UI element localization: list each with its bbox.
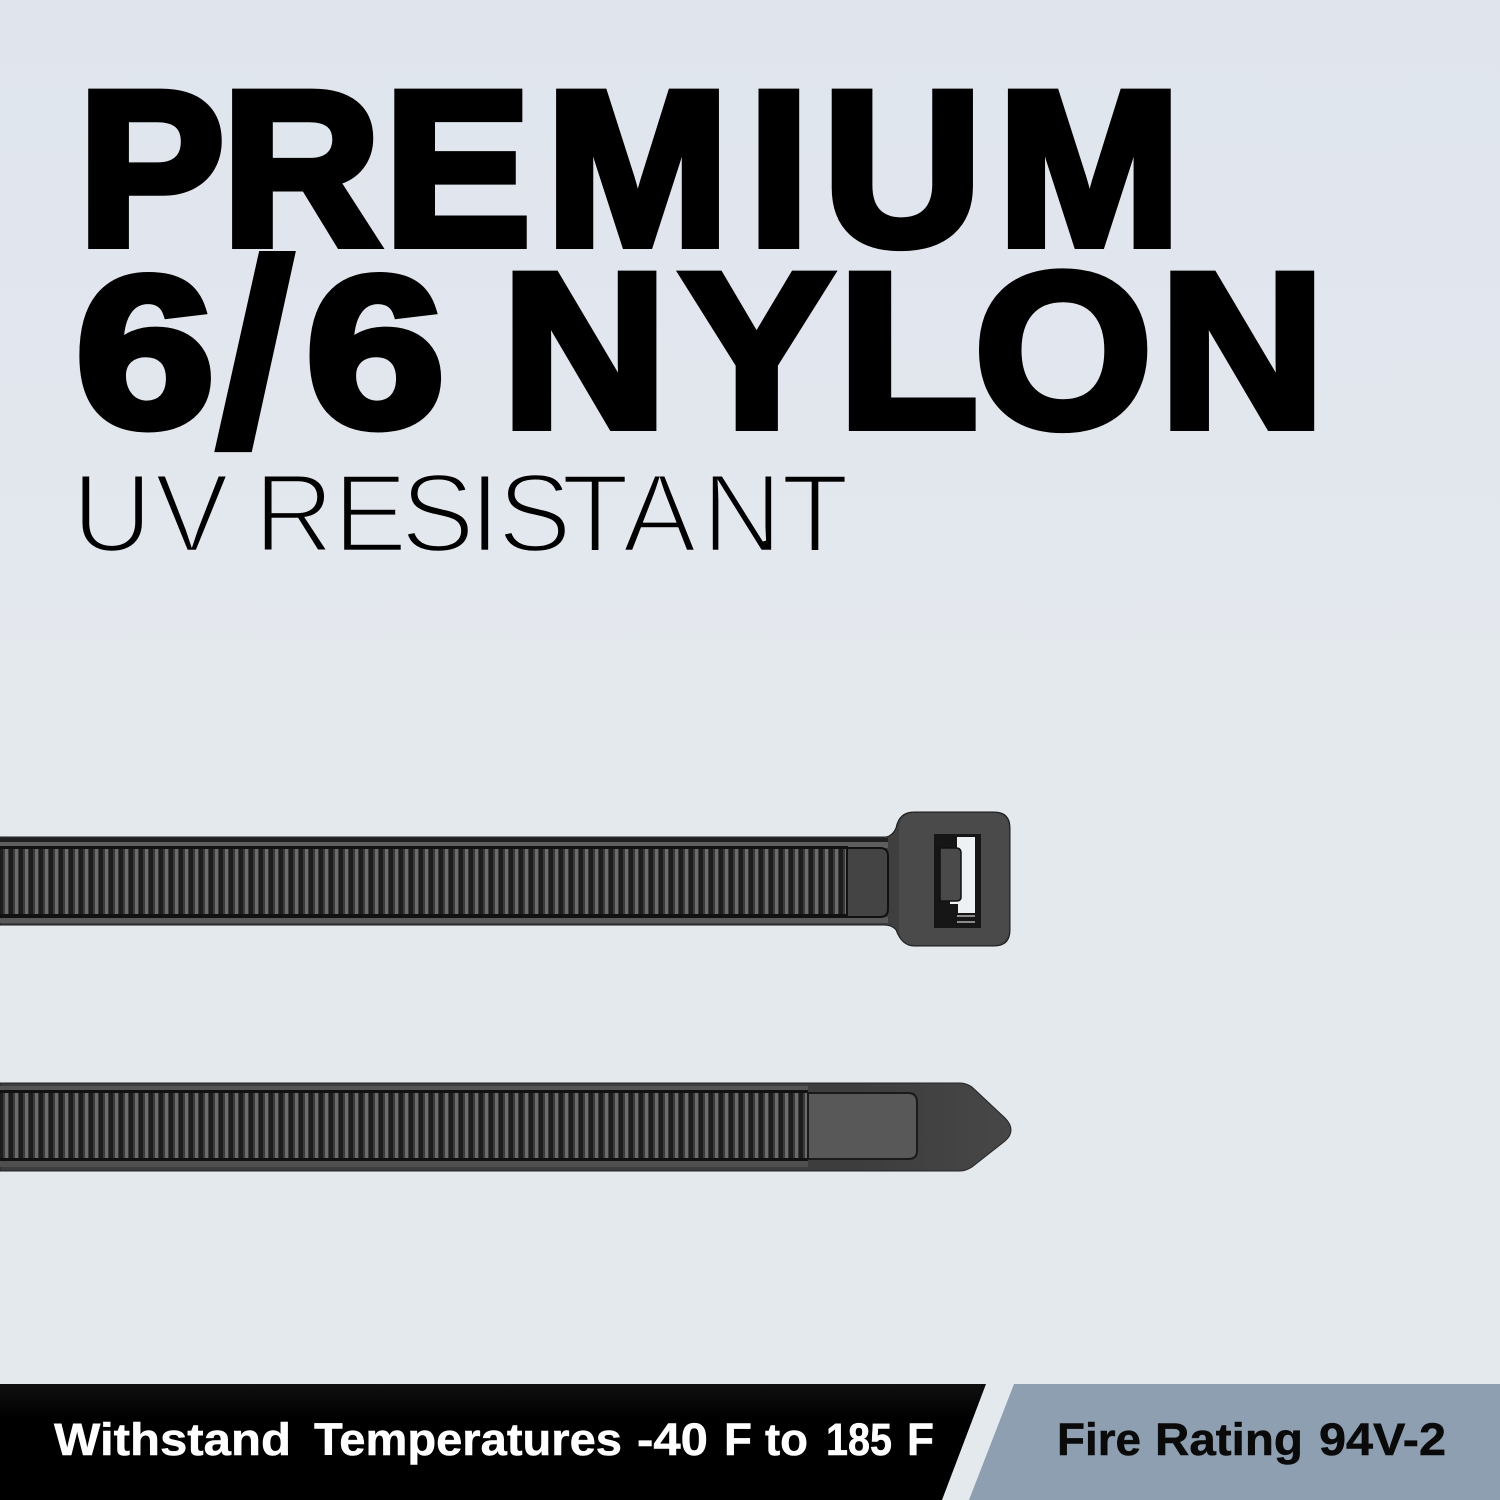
- footer: temperature band: F: [907, 1414, 934, 1465]
- smooth panel: [808, 1093, 917, 1159]
- smooth panel: [847, 848, 888, 917]
- footer: temperature band: -40: [637, 1414, 708, 1465]
- footer: temperature band: F: [724, 1414, 752, 1465]
- footer: fire rating band: [969, 1384, 1500, 1500]
- footer: temperature band: 185: [826, 1414, 892, 1465]
- footer: fire rating band: 94V-2: [1319, 1414, 1446, 1465]
- head window: [934, 834, 981, 928]
- head face: [899, 813, 1009, 945]
- footer: fire rating band: Rating: [1155, 1414, 1303, 1465]
- footer: temperature band: [0, 1384, 986, 1500]
- title: NYLON: [502, 228, 1325, 474]
- title: 6: [75, 233, 215, 472]
- ribs: [0, 1093, 808, 1160]
- title: [75, 46, 1325, 505]
- title: /: [211, 203, 300, 505]
- footer: temperature band: Withstand: [54, 1414, 291, 1465]
- subtitle: UV RESISTANT: [72, 452, 849, 576]
- title: 6: [306, 233, 445, 472]
- footer: fire rating band: Fire: [1057, 1414, 1141, 1465]
- cable tie head end: [0, 812, 1010, 946]
- ribs: [0, 848, 848, 917]
- footer: temperature band: Temperatures: [314, 1414, 622, 1465]
- footer: temperature band: to: [765, 1414, 808, 1465]
- title: PREMIUM: [78, 46, 1181, 292]
- cable tie tail end: [0, 1083, 1011, 1171]
